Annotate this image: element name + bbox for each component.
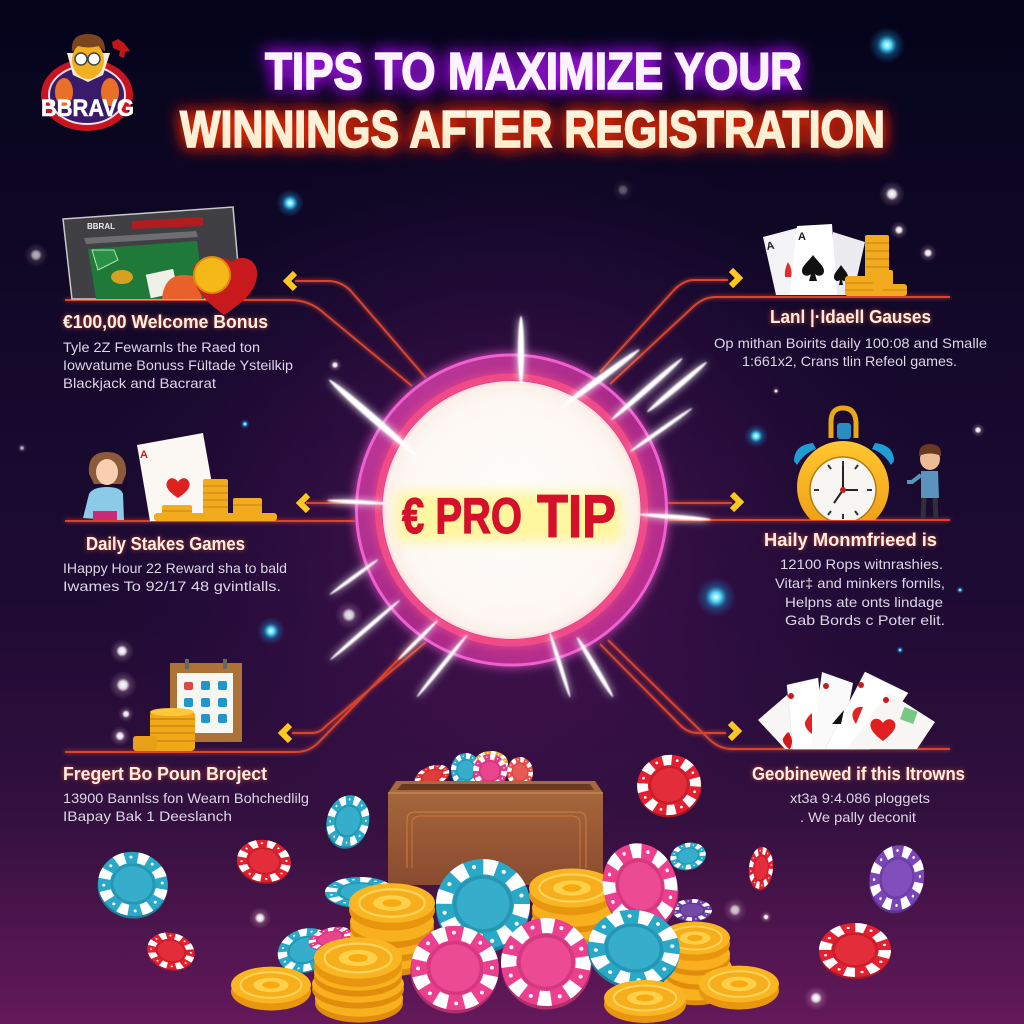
panel: combined bonus [752,672,965,825]
heading: €100,00 Welcome Bonus [63,312,268,332]
teal chip front [583,904,685,995]
pink chips front [403,912,597,1022]
back chips [272,877,712,981]
icon: playing card with heart [137,433,214,521]
body text [714,335,987,369]
coin stack right [660,921,732,1005]
icon: playing cards [763,224,865,295]
body text: Gab Bords c Poter elit. [785,612,945,628]
icon: playing cards: A [765,240,775,253]
floating chips [93,748,930,979]
glowing ring [356,355,666,665]
heading: Lanl |·Idaell Gauses [770,307,931,327]
logo: BBRAVG mascot [41,34,134,131]
icon: tablet with table game [63,207,241,299]
title line 2: WINNINGS AFTER REGISTRATION [180,101,885,159]
body text [775,556,945,628]
panel: daily monthly tips [764,408,945,628]
icon: man [907,444,941,518]
central pro tip badge [356,355,666,665]
starburst rays around badge [327,316,711,698]
white disc [382,381,640,639]
body text: Iowvatume Bonuss Fültade Ysteilkip [63,357,293,373]
body text: . We pally deconit [800,809,916,825]
body text: Blackjack and Bacrarat [63,375,216,391]
heading: Haily Monmfrieed is [764,530,937,550]
body text [63,560,287,594]
pro tip label [402,483,616,550]
body text: 1:661x2, Crans tlin Refeol games. [742,353,957,369]
body text [63,790,309,824]
yellow highlight behind label [396,492,622,542]
coin stack back left [349,883,435,976]
icon: fan of playing cards [758,672,935,749]
icon: calendar [170,659,242,742]
icon: coin stacks [845,235,907,296]
icon: tablet with table game: BBRAL [87,222,115,231]
panel: daily stakes games [63,433,287,594]
body text [790,790,930,825]
arrowheads [282,270,740,741]
panel: welcome bonus [63,207,293,391]
title [180,43,885,159]
chips in box [412,751,533,792]
body text: Tyle 2Z Fewarnls the Raed ton [63,339,260,355]
icon: playing cards: A [798,231,806,243]
body text: xt3a 9:4.086 ploggets [790,790,930,806]
icon: coin stack [133,708,195,751]
body text [63,339,293,391]
panel: frequent bonus project [63,659,309,824]
loose coins [231,966,779,1023]
pro tip label: TIP [537,483,616,550]
body text: IHappy Hour 22 Reward sha to bald [63,560,287,576]
teal chip large [436,859,530,953]
panel: live table games [714,224,987,369]
heading: Fregert Bo Poun Broject [63,764,267,784]
body text: Iwames To 92/17 48 gvintlalls. [63,578,281,594]
treasure box with chips [388,751,603,885]
title line 1: TIPS TO MAXIMIZE YOUR [265,43,802,101]
logo: BBRAVG mascot: BBRAVG [41,95,134,122]
body text: Helpns ate onts lindage [785,594,943,610]
pink chip standing [593,835,688,940]
pro tip label: € PRO [402,488,522,544]
icon: heart with gold coin [193,257,257,315]
body text: IBapay Bak 1 Deeslanch [63,808,232,824]
pile of chips and coins [231,835,779,1023]
heading: Daily Stakes Games [86,534,245,554]
coin stack front left [312,937,404,1023]
body text: Vitar‡ and minkers fornils, [775,575,945,591]
body text: 13900 Bannlss fon Wearn Bohchedlilg [63,790,309,806]
icon: playing card with heart: A [140,449,148,461]
body text: 12100 Rops witnrashies. [780,556,943,572]
icon: woman [83,452,126,520]
icon: alarm clock [794,408,894,533]
icon: coin stacks [154,479,277,521]
body text: Op mithan Boirits daily 100:08 and Smalle [714,335,987,351]
heading: Geobinewed if this Itrowns [752,764,965,784]
connector lines [65,280,950,752]
coin stack back right [529,868,616,947]
